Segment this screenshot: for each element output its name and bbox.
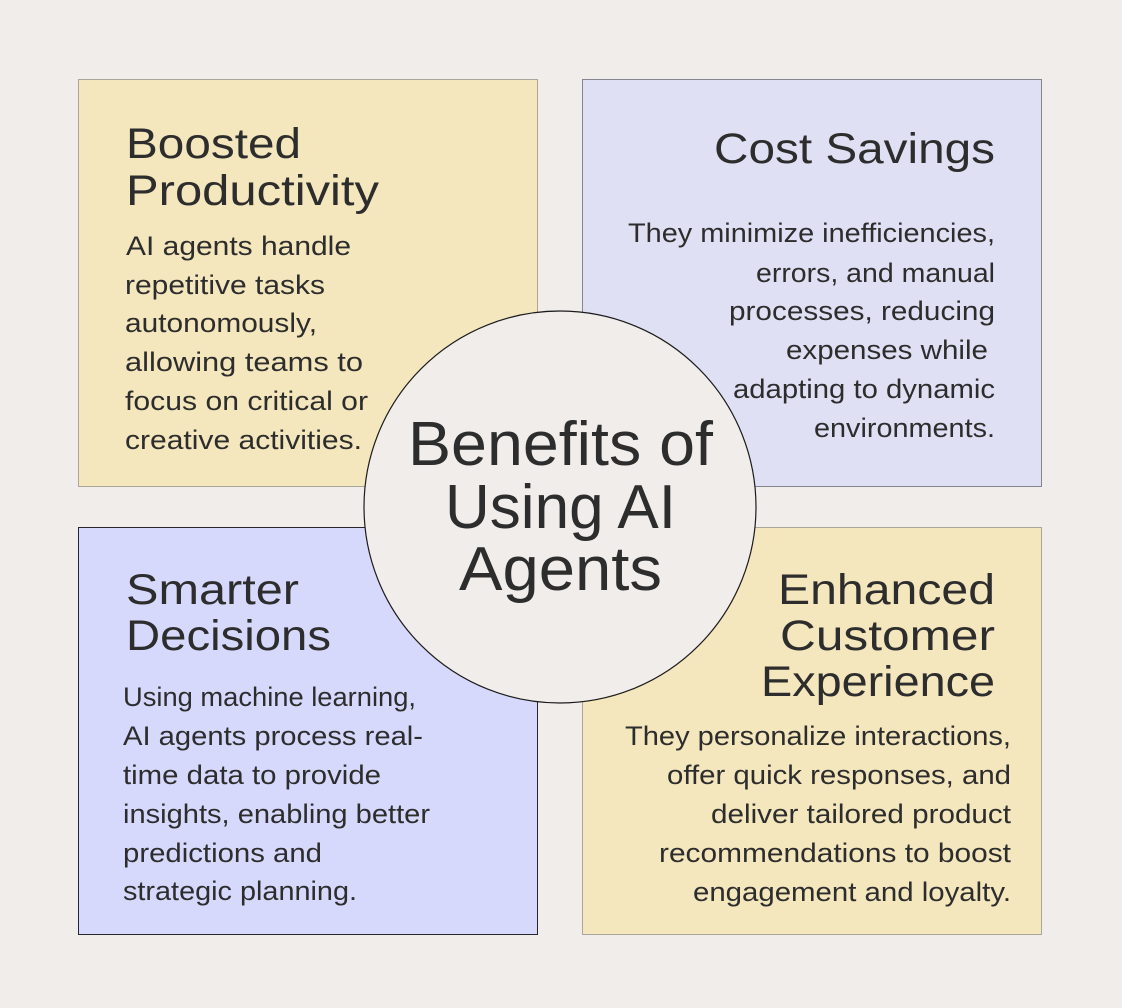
text: smarter decisions description: predictions and xyxy=(123,838,322,868)
text: smarter decisions description: time data to provide xyxy=(123,760,381,790)
text: cost savings description: They minimize inefficiencies, xyxy=(628,218,995,248)
heading: enhanced customer experience: Experience xyxy=(761,658,995,706)
panel: enhanced customer experience xyxy=(582,528,1042,934)
text: smarter decisions description: Using machine learning, xyxy=(123,682,416,712)
text: smarter decisions description: AI agents process real- xyxy=(123,721,423,751)
text: cost savings description: adapting to dynamic xyxy=(733,374,995,404)
text: boosted productivity description: allowing teams to xyxy=(125,347,363,377)
text: smarter decisions description: strategic planning. xyxy=(123,876,357,906)
panel: smarter decisions xyxy=(78,528,538,934)
panel: cost savings xyxy=(582,80,1042,486)
text: boosted productivity description: focus on critical or xyxy=(125,386,368,416)
text: cost savings description xyxy=(628,218,995,443)
heading: smarter decisions xyxy=(126,566,331,660)
text: enhanced customer experience description: engagement and loyalty. xyxy=(693,877,1011,907)
heading: enhanced customer experience: Enhanced xyxy=(778,566,995,614)
title xyxy=(408,410,714,604)
text: boosted productivity description: creative activities. xyxy=(125,425,362,455)
text: boosted productivity description: AI agents handle xyxy=(126,231,351,261)
text: enhanced customer experience description: They personalize interactions, xyxy=(625,721,1011,751)
heading: smarter decisions: Decisions xyxy=(126,612,331,660)
text: enhanced customer experience description: recommendations to boost xyxy=(659,838,1012,868)
panel: boosted productivity xyxy=(78,80,538,486)
text: smarter decisions description: insights, enabling better xyxy=(123,799,430,829)
heading: smarter decisions: Smarter xyxy=(126,566,299,614)
text: cost savings description: environments. xyxy=(814,413,995,443)
text: enhanced customer experience description xyxy=(625,721,1012,907)
center circle with title xyxy=(364,311,756,703)
text: smarter decisions description xyxy=(123,682,430,906)
text: boosted productivity description: autonomously, xyxy=(125,308,317,338)
text: cost savings description: expenses while xyxy=(786,335,988,365)
heading: boosted productivity xyxy=(126,120,380,215)
text: boosted productivity description: repetitive tasks xyxy=(125,270,325,300)
title: Benefits of xyxy=(408,410,714,479)
heading: enhanced customer experience: Customer xyxy=(780,612,995,660)
text: enhanced customer experience description: offer quick responses, and xyxy=(667,760,1011,790)
title: Agents xyxy=(459,535,662,604)
heading: enhanced customer experience xyxy=(761,566,995,706)
text: cost savings description: processes, reducing xyxy=(729,296,995,326)
title: Using AI xyxy=(445,473,676,542)
heading: boosted productivity: Productivity xyxy=(126,167,380,215)
heading: cost savings: Cost Savings xyxy=(714,125,995,173)
text: boosted productivity description xyxy=(125,231,368,455)
heading: boosted productivity: Boosted xyxy=(126,120,301,168)
text: cost savings description: errors, and manual xyxy=(756,258,995,288)
text: enhanced customer experience description: deliver tailored product xyxy=(711,799,1012,829)
